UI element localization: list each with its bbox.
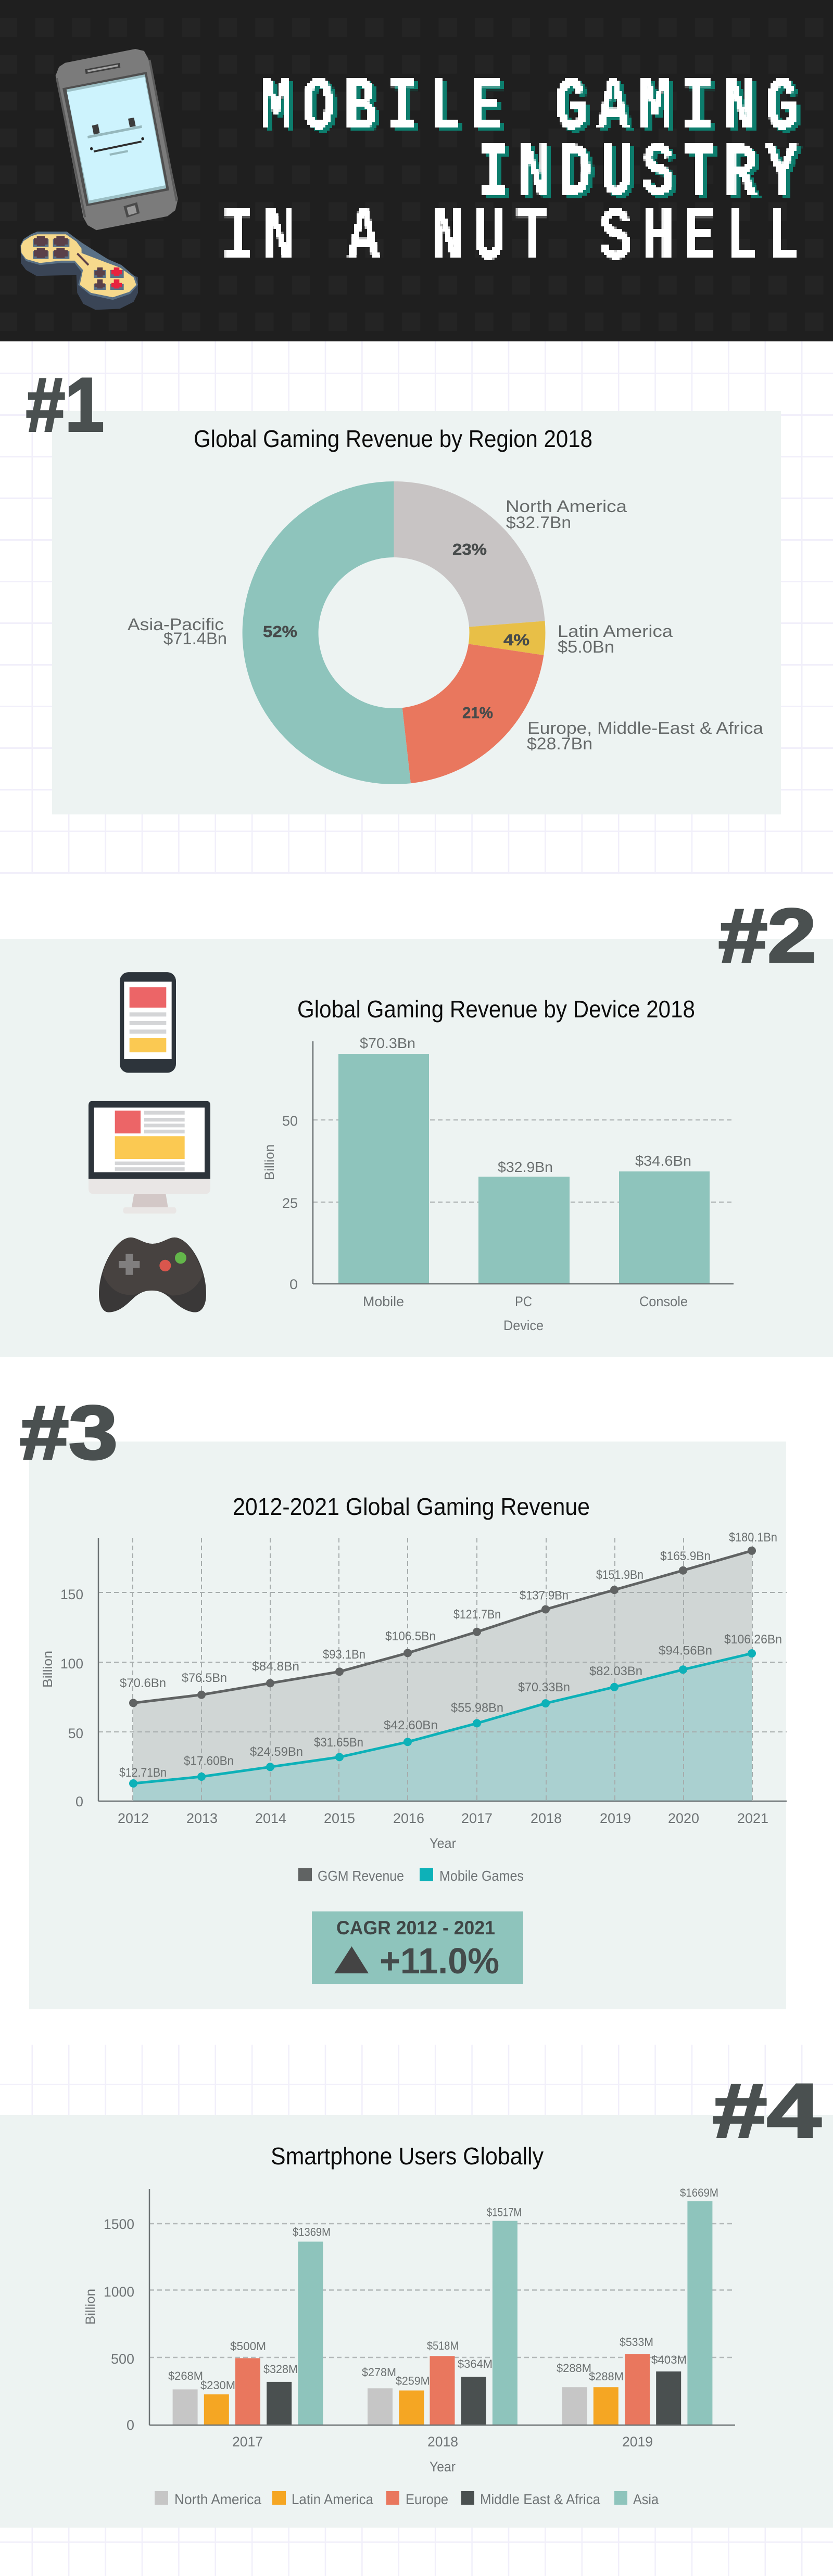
- area line chart: GGM revenue and mobile games: 150: [60, 1587, 83, 1602]
- title: MOBILE GAMING: [259, 66, 807, 152]
- area line chart: GGM revenue and mobile games: Year: [430, 1835, 456, 1851]
- label: Europe, Middle-East and Africa: Europe, Middle-East & Africa: [527, 719, 763, 737]
- area line chart: GGM revenue and mobile games: $106.5Bn: [385, 1629, 436, 1643]
- panel: section 3 revenue trend: [20, 1390, 787, 2009]
- icon: pixel game controller: [20, 232, 138, 310]
- grouped bar chart: $500M: [230, 2340, 266, 2353]
- heading: #2: #2: [718, 893, 816, 978]
- area line chart: GGM revenue and mobile games: $17.60Bn: [184, 1754, 234, 1768]
- donut chart: 21%: [462, 704, 493, 722]
- area line chart: GGM revenue and mobile games: 2018: [531, 1810, 562, 1826]
- area line chart: GGM revenue and mobile games: [41, 1531, 787, 1851]
- bar chart: revenue by device: $34.6Bn: [635, 1153, 691, 1169]
- bar chart: revenue by device: Device: [503, 1318, 544, 1333]
- panel: section 4 smartphone users: [0, 2068, 833, 2528]
- label: Asia-Pacific: Asia-Pacific: [128, 615, 224, 634]
- area line chart: GGM revenue and mobile games: $94.56Bn: [659, 1643, 712, 1658]
- legend: [298, 1868, 524, 1884]
- chart title: 2012-2021 Global Gaming Revenue: [233, 1493, 590, 1520]
- grouped bar chart: $533M: [620, 2336, 653, 2349]
- bar chart: revenue by device: 25: [282, 1195, 298, 1211]
- legend: North America: [174, 2491, 261, 2507]
- label: North America: $32.7Bn: [506, 513, 571, 532]
- bar chart: revenue by device: 50: [282, 1113, 298, 1129]
- grouped bar chart: 2019: [622, 2434, 653, 2450]
- chart title: Global Gaming Revenue by Device 2018: [297, 996, 695, 1023]
- grouped bar chart: $1517M: [487, 2206, 522, 2219]
- area line chart: GGM revenue and mobile games: $121.7Bn: [453, 1608, 501, 1622]
- bar chart: revenue by device: $70.3Bn: [360, 1035, 415, 1051]
- label: Europe, Middle-East and Africa: $28.7Bn: [527, 734, 592, 753]
- legend: [155, 2491, 659, 2507]
- bar chart: revenue by device: Billion: [262, 1144, 277, 1180]
- grouped bar chart: $1669M: [680, 2186, 718, 2199]
- title line 3: IN A NUT SHELL: [221, 196, 810, 282]
- legend: Europe: [406, 2491, 448, 2507]
- area line chart: GGM revenue and mobile games: $82.03Bn: [589, 1664, 642, 1678]
- icon: pixel smartphone with smiling face: [56, 49, 178, 230]
- label: Asia-Pacific: [128, 615, 227, 648]
- grouped bar chart: $288M: [589, 2370, 624, 2383]
- bar chart: revenue by device: PC: [515, 1294, 532, 1309]
- area line chart: GGM revenue and mobile games: $12.71Bn: [119, 1766, 167, 1780]
- grouped bar chart: 1500: [104, 2216, 134, 2232]
- grouped bar chart: Billion: [83, 2289, 98, 2325]
- grouped bar chart: $328M: [263, 2363, 298, 2376]
- legend: Middle East & Africa: [480, 2491, 600, 2507]
- area line chart: GGM revenue and mobile games: $151.9Bn: [596, 1568, 643, 1582]
- area line chart: GGM revenue and mobile games: 0: [75, 1794, 83, 1809]
- grouped bar chart: $518M: [427, 2339, 459, 2352]
- chart title: Global Gaming Revenue by Region 2018: [194, 425, 592, 452]
- grouped bar chart: $278M: [362, 2366, 396, 2379]
- icon: desktop monitor: [89, 1101, 210, 1214]
- grouped bar chart: 2017: [232, 2434, 263, 2450]
- heading: #4: #4: [713, 2068, 821, 2153]
- area line chart: GGM revenue and mobile games: 2021: [737, 1810, 768, 1826]
- donut chart: [243, 481, 545, 784]
- area line chart: GGM revenue and mobile games: 2012: [118, 1810, 149, 1826]
- grouped bar chart: 500: [111, 2351, 134, 2367]
- chart title: Smartphone Users Globally: [271, 2143, 544, 2170]
- bar chart: revenue by device: Console: [639, 1294, 688, 1309]
- area line chart: GGM revenue and mobile games: $70.6Bn: [120, 1676, 166, 1690]
- bar chart: revenue by device: Mobile: [363, 1294, 404, 1309]
- bar chart: revenue by device: $32.9Bn: [498, 1159, 553, 1175]
- grouped bar chart: 2018: [427, 2434, 458, 2450]
- area line chart: GGM revenue and mobile games: 50: [68, 1726, 83, 1741]
- grouped bar chart: $364M: [458, 2357, 493, 2370]
- icon: up triangle: [334, 1946, 369, 1973]
- header banner: [0, 0, 833, 341]
- grouped bar chart: [83, 2186, 735, 2475]
- bar chart: revenue by device: 0: [289, 1277, 298, 1292]
- donut chart: 4%: [503, 631, 529, 649]
- label: North America: North America: [506, 497, 627, 516]
- callout: CAGR: CAGR 2012 - 2021: [336, 1917, 495, 1939]
- area line chart: GGM revenue and mobile games: $137.9Bn: [520, 1588, 569, 1603]
- area line chart: GGM revenue and mobile games: $93.1Bn: [323, 1648, 365, 1662]
- area line chart: GGM revenue and mobile games: 2015: [324, 1810, 355, 1826]
- area line chart: GGM revenue and mobile games: $165.9Bn: [660, 1549, 711, 1563]
- label: Asia-Pacific: $71.4Bn: [163, 629, 227, 648]
- bar chart: revenue by device: [262, 1035, 734, 1333]
- donut chart: 52%: [263, 622, 297, 641]
- label: Latin America: [558, 622, 673, 656]
- label: Latin America: $5.0Bn: [558, 637, 614, 656]
- area line chart: GGM revenue and mobile games: $31.65Bn: [314, 1736, 363, 1750]
- area line chart: GGM revenue and mobile games: $42.60Bn: [384, 1718, 438, 1732]
- grouped bar chart: Year: [430, 2459, 456, 2475]
- panel: section 2 devices: [0, 893, 833, 1357]
- area line chart: GGM revenue and mobile games: $70.33Bn: [518, 1680, 570, 1694]
- legend: GGM Revenue: [318, 1868, 404, 1884]
- callout: CAGR: [312, 1911, 523, 1984]
- area line chart: GGM revenue and mobile games: $76.5Bn: [182, 1671, 227, 1685]
- donut chart: 23%: [452, 540, 487, 558]
- area line chart: GGM revenue and mobile games: 100: [60, 1656, 83, 1672]
- legend: Asia: [633, 2491, 659, 2507]
- title: [259, 66, 807, 218]
- area line chart: GGM revenue and mobile games: $84.8Bn: [252, 1660, 299, 1674]
- area line chart: GGM revenue and mobile games: 2020: [668, 1810, 699, 1826]
- icon: mobile phone: [120, 972, 176, 1073]
- label: Latin America: Latin America: [558, 622, 673, 641]
- legend: Latin America: [292, 2491, 373, 2507]
- title: INDUSTRY: [477, 131, 806, 218]
- area line chart: GGM revenue and mobile games: $55.98Bn: [451, 1701, 503, 1715]
- grouped bar chart: 1000: [104, 2284, 134, 2300]
- panel: section 1 donut: [26, 362, 781, 814]
- legend: Mobile Games: [439, 1868, 524, 1884]
- grouped bar chart: $288M: [557, 2362, 591, 2375]
- grouped bar chart: $1369M: [293, 2225, 331, 2239]
- area line chart: GGM revenue and mobile games: 2014: [255, 1810, 286, 1826]
- area line chart: GGM revenue and mobile games: 2016: [393, 1810, 424, 1826]
- area line chart: GGM revenue and mobile games: 2019: [600, 1810, 631, 1826]
- grouped bar chart: $259M: [396, 2374, 430, 2388]
- callout: CAGR: +11.0%: [380, 1941, 499, 1981]
- grouped bar chart: $403M: [651, 2353, 687, 2366]
- area line chart: GGM revenue and mobile games: Billion: [41, 1651, 55, 1688]
- grouped bar chart: $230M: [200, 2379, 235, 2392]
- grouped bar chart: 0: [127, 2417, 134, 2433]
- area line chart: GGM revenue and mobile games: 2013: [186, 1810, 218, 1826]
- area line chart: GGM revenue and mobile games: $180.1Bn: [729, 1531, 777, 1545]
- grouped bar chart: $268M: [168, 2369, 203, 2382]
- label: Europe, Middle-East and Africa: [527, 719, 763, 753]
- label: North America: [506, 497, 627, 532]
- area line chart: GGM revenue and mobile games: $24.59Bn: [250, 1745, 303, 1759]
- heading: #1: #1: [26, 362, 104, 447]
- heading: #3: #3: [20, 1390, 118, 1475]
- icon: gamepad: [99, 1238, 206, 1312]
- area line chart: GGM revenue and mobile games: 2017: [461, 1810, 493, 1826]
- area line chart: GGM revenue and mobile games: $106.26Bn: [724, 1633, 782, 1647]
